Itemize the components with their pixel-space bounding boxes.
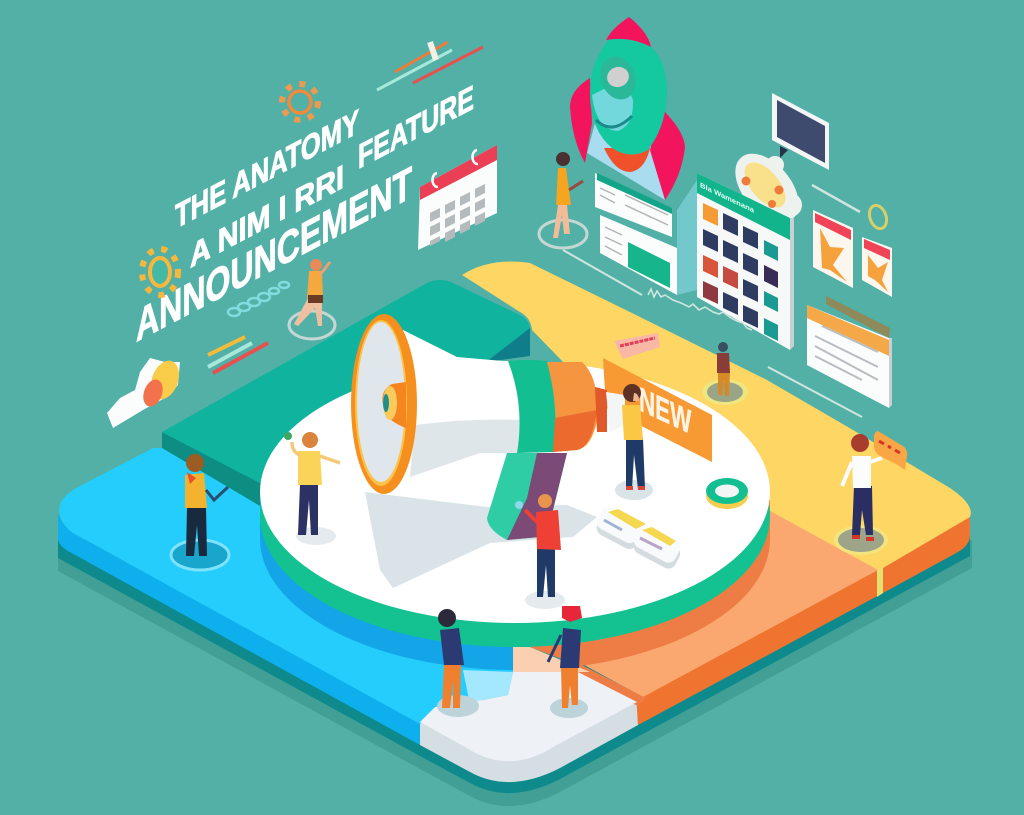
title line 2 right: FEATURE [358, 78, 474, 177]
card: star large [813, 210, 853, 288]
platform dark base [58, 530, 970, 793]
disc lower rim blue [260, 500, 513, 670]
panel: teal [162, 280, 530, 506]
person: yellow shirt man [284, 432, 340, 545]
title [136, 78, 474, 352]
rocket exhaust [587, 123, 672, 200]
title line 1: THE ANATOMY [175, 102, 359, 237]
orange band [547, 362, 597, 452]
title line 3: ANNOUNCEMENT [136, 156, 412, 352]
central disc [260, 361, 770, 670]
disc lower rim orange [530, 500, 770, 666]
handle [487, 453, 567, 540]
bell rim [351, 314, 417, 494]
small connector with badge [812, 185, 890, 231]
pale peach patch [513, 647, 590, 672]
isometric platform [58, 262, 971, 782]
person: small on yellow panel [702, 342, 748, 405]
decorative lines top [377, 42, 483, 90]
ring icon [706, 478, 748, 509]
rocket [570, 17, 685, 200]
card: calendar grid [697, 173, 794, 350]
monitor [772, 93, 829, 170]
person: upper woman [539, 152, 587, 248]
person: bottom right [548, 606, 588, 718]
nose [606, 17, 651, 47]
person: blue panel woman [171, 454, 229, 570]
left fin [570, 78, 592, 163]
orange strip beside white corner [572, 660, 646, 706]
icon: map splash [107, 357, 184, 428]
title line 2 left: A NIM I RRI [190, 157, 344, 275]
green band [508, 360, 557, 453]
neck [595, 387, 607, 432]
card: with green box [600, 215, 677, 295]
NEW label: NEW [639, 380, 691, 442]
disc green band [260, 385, 770, 647]
light blue patch [463, 670, 513, 705]
platform shadow [58, 540, 972, 806]
icon: yellow gear [142, 249, 178, 295]
glow behind calendar [677, 180, 697, 295]
icon: title calendar [418, 145, 497, 250]
megaphone shadow [365, 492, 597, 588]
person: dancer near title [289, 259, 335, 339]
megaphone [351, 314, 625, 540]
person: bottom left [437, 609, 479, 717]
panel: blue [59, 448, 513, 724]
person: white shirt man [834, 431, 907, 555]
connector lines and squiggle [563, 250, 862, 417]
popcorn cloud [723, 142, 811, 234]
right fin [650, 107, 685, 200]
flame nozzle [604, 148, 650, 172]
chain decoration [228, 282, 289, 316]
document panel [807, 296, 892, 408]
small sticky note [614, 333, 660, 359]
porthole ring [595, 52, 641, 104]
icon: orange gear [282, 84, 318, 120]
horn driver [382, 382, 406, 428]
stacked buttons [594, 504, 683, 571]
speech bubble [874, 431, 907, 470]
panel: yellow [462, 262, 971, 570]
card: star small [862, 237, 892, 297]
person: red shirt [515, 494, 565, 609]
platform side walls [58, 513, 420, 745]
body [590, 36, 667, 155]
decorative lines lower [208, 337, 268, 373]
card: list top [595, 173, 672, 237]
panel: white corner [420, 672, 637, 761]
person: woman by sign [615, 384, 653, 500]
disc top [260, 361, 770, 623]
card: calendar grid: Bla Wamenana [700, 182, 754, 215]
NEW sign [603, 358, 712, 462]
lens [592, 85, 633, 131]
panel: orange [575, 510, 878, 697]
horn body [403, 330, 525, 477]
